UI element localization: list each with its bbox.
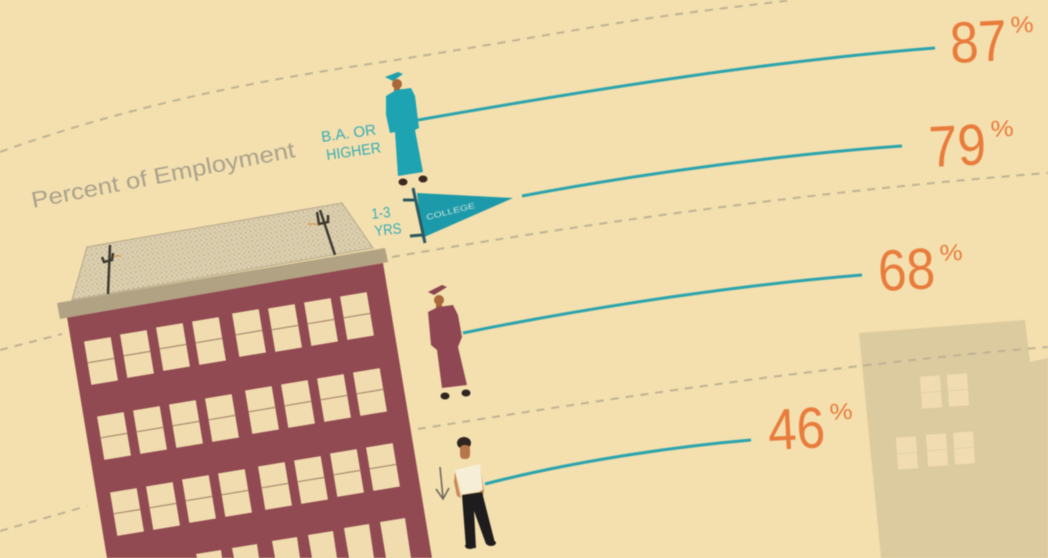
partial windows at bottom edge [196, 518, 411, 558]
antenna right [308, 210, 335, 255]
value: 46%: % [829, 398, 853, 425]
icon: college pennant: COLLEGE [425, 201, 476, 222]
icon: student without diploma [454, 437, 496, 549]
line: B.A. or higher 87% [418, 48, 935, 120]
value: 87%: % [1010, 11, 1034, 38]
value: 68%: % [939, 239, 963, 266]
label: 1-3 yrs [371, 204, 402, 240]
icon: maroon graduate [428, 285, 470, 400]
main maroon building [57, 203, 432, 558]
axis label: Percent of Employment: Percent of Employment [29, 137, 298, 213]
icon: down arrow [436, 467, 449, 499]
icon: college pennant [403, 188, 513, 243]
roof [72, 203, 373, 300]
label: B.A. or higher: B.A. OR [320, 121, 377, 146]
label: 1-3 yrs: 1-3 [371, 204, 391, 223]
value: 79%: 79 [927, 112, 988, 180]
line: 1-3 years college 79% [522, 146, 902, 196]
value: 68%: 68 [876, 236, 937, 304]
value: 87%: 87 [948, 8, 1009, 76]
antenna left [102, 245, 121, 294]
label: B.A. or higher: HIGHER [325, 139, 382, 164]
value: 79%: % [990, 115, 1014, 142]
background building [859, 320, 1048, 558]
line: high school graduate 68% [463, 275, 862, 333]
label: 1-3 yrs: YRS [374, 220, 402, 240]
windows [84, 292, 411, 558]
line: no diploma 46% [485, 440, 751, 484]
label: B.A. or higher [320, 121, 382, 164]
building wall [67, 263, 432, 558]
cornice [57, 248, 388, 319]
value: 46%: 46 [766, 395, 827, 463]
icon: teal graduate [385, 72, 428, 186]
